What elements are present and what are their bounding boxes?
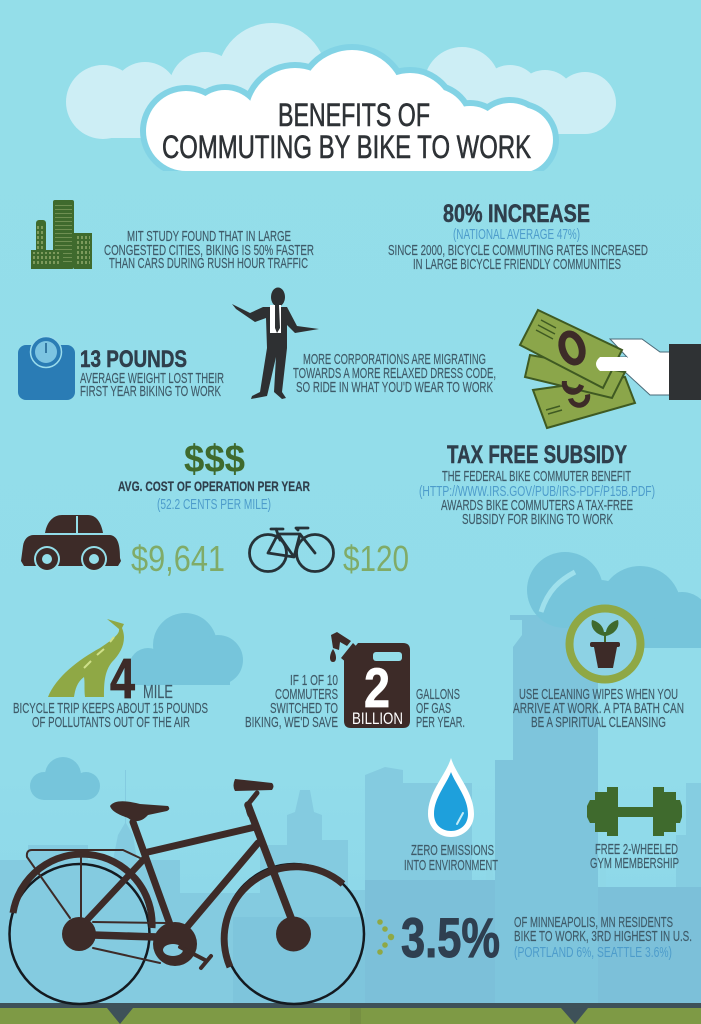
text: dress code: SO RIDE IN WHAT YOU'D WEAR TO WORK bbox=[296, 380, 493, 396]
text: dress code: MORE CORPORATIONS ARE MIGRATING bbox=[303, 352, 486, 368]
icon: businessman bbox=[232, 288, 319, 399]
cloud: small left bbox=[30, 757, 100, 800]
text: zero emissions: ZERO EMISSIONS bbox=[411, 843, 494, 859]
icon: hand with money bbox=[520, 310, 701, 428]
text: zero emissions: INTO ENVIRONMENT bbox=[404, 858, 498, 874]
text: gallons: OF GAS bbox=[416, 701, 451, 717]
cloud: behind tower top right bbox=[527, 552, 701, 648]
text: dress code: TOWARDS A MORE RELAXED DRESS CODE, bbox=[293, 366, 496, 382]
icon: winding road bbox=[48, 619, 124, 697]
title: COMMUTING BY BIKE TO WORK bbox=[162, 129, 531, 165]
text: gas commuters: COMMUTERS bbox=[275, 687, 338, 703]
text: gas commuters bbox=[245, 673, 338, 731]
stat: 80% increase bbox=[388, 200, 648, 273]
illustration: large bicycle bbox=[10, 779, 364, 1004]
text: gas commuters: IF 1 OF 10 bbox=[290, 673, 338, 689]
cloud: behind road bbox=[129, 613, 243, 686]
icon: gas can bbox=[330, 632, 410, 728]
text: gym membership bbox=[590, 842, 679, 872]
stat: 4 mile: 4 bbox=[110, 647, 135, 711]
text: gallons bbox=[416, 687, 465, 731]
text: MIT study bbox=[104, 229, 314, 272]
value: bike cost: $120 bbox=[343, 538, 409, 579]
title: BENEFITS OF bbox=[278, 97, 430, 133]
stat: 4 mile: OF POLLUTANTS OUT OF THE AIR bbox=[32, 715, 190, 731]
stat: 13 pounds: 13 POUNDS bbox=[80, 346, 187, 373]
stat: 13 pounds: AVERAGE WEIGHT LOST THEIR bbox=[80, 371, 224, 387]
stat: cost heading bbox=[118, 438, 310, 513]
text: gallons: PER YEAR. bbox=[416, 715, 465, 731]
stat: tax free subsidy: TAX FREE SUBSIDY bbox=[447, 441, 627, 469]
icon: gas can: 2 bbox=[364, 656, 390, 719]
stat: cost heading: $$$ bbox=[184, 438, 245, 481]
stat: 13 pounds: FIRST YEAR BIKING TO WORK bbox=[80, 384, 221, 400]
icon: dumbbell bbox=[587, 787, 682, 836]
text: gas commuters: SWITCHED TO bbox=[270, 701, 338, 717]
clouds: pale behind title bbox=[66, 23, 616, 139]
stat: 4 mile: MILE bbox=[143, 682, 173, 702]
icon: car bbox=[21, 515, 121, 572]
text: MIT study: THAN CARS DURING RUSH HOUR TRAFFIC bbox=[109, 256, 308, 272]
stat: 3.5 percent bbox=[401, 906, 692, 969]
text: MIT study: CONGESTED CITIES, BIKING IS 50% FASTER bbox=[104, 243, 314, 259]
title bbox=[162, 97, 531, 165]
stat: tax free subsidy: SUBSIDY FOR BIKING TO WORK bbox=[462, 512, 613, 528]
stat: 3.5 percent: 3.5% bbox=[401, 906, 500, 969]
stat: 80% increase: 80% INCREASE bbox=[443, 200, 590, 228]
icon: potted plant bbox=[570, 608, 640, 680]
icon: chevron dots bbox=[377, 919, 394, 955]
stat: 4 mile bbox=[13, 647, 208, 731]
stat: 13 pounds bbox=[80, 346, 224, 400]
stat: 80% increase: (NATIONAL AVERAGE 47%) bbox=[453, 227, 580, 243]
icon: water drop bbox=[428, 758, 474, 837]
text: gallons: GALLONS bbox=[416, 687, 460, 703]
text: dress code bbox=[293, 352, 496, 396]
ground bbox=[0, 1003, 701, 1024]
icon: city buildings bbox=[31, 200, 92, 269]
stat: cost heading: AVG. COST OF OPERATION PER YEAR bbox=[118, 478, 310, 494]
text: zero emissions bbox=[404, 843, 498, 874]
title cloud bbox=[130, 44, 570, 185]
text: MIT study: MIT STUDY FOUND THAT IN LARGE bbox=[127, 229, 291, 245]
icon: small bike bbox=[250, 528, 334, 572]
icon: gas can: BILLION bbox=[352, 709, 403, 728]
stat: 4 mile: BICYCLE TRIP KEEPS ABOUT 15 POUNDS bbox=[13, 701, 208, 717]
icon: weight scale bbox=[18, 336, 75, 400]
value: car cost: $9,641 bbox=[131, 538, 225, 579]
text: cleaning wipes bbox=[513, 687, 684, 731]
stat: cost heading: (52.2 CENTS PER MILE) bbox=[157, 497, 271, 513]
text: gas commuters: BIKING, WE'D SAVE bbox=[245, 715, 338, 731]
stat: tax free subsidy bbox=[419, 441, 655, 528]
skyline background bbox=[0, 615, 701, 1003]
